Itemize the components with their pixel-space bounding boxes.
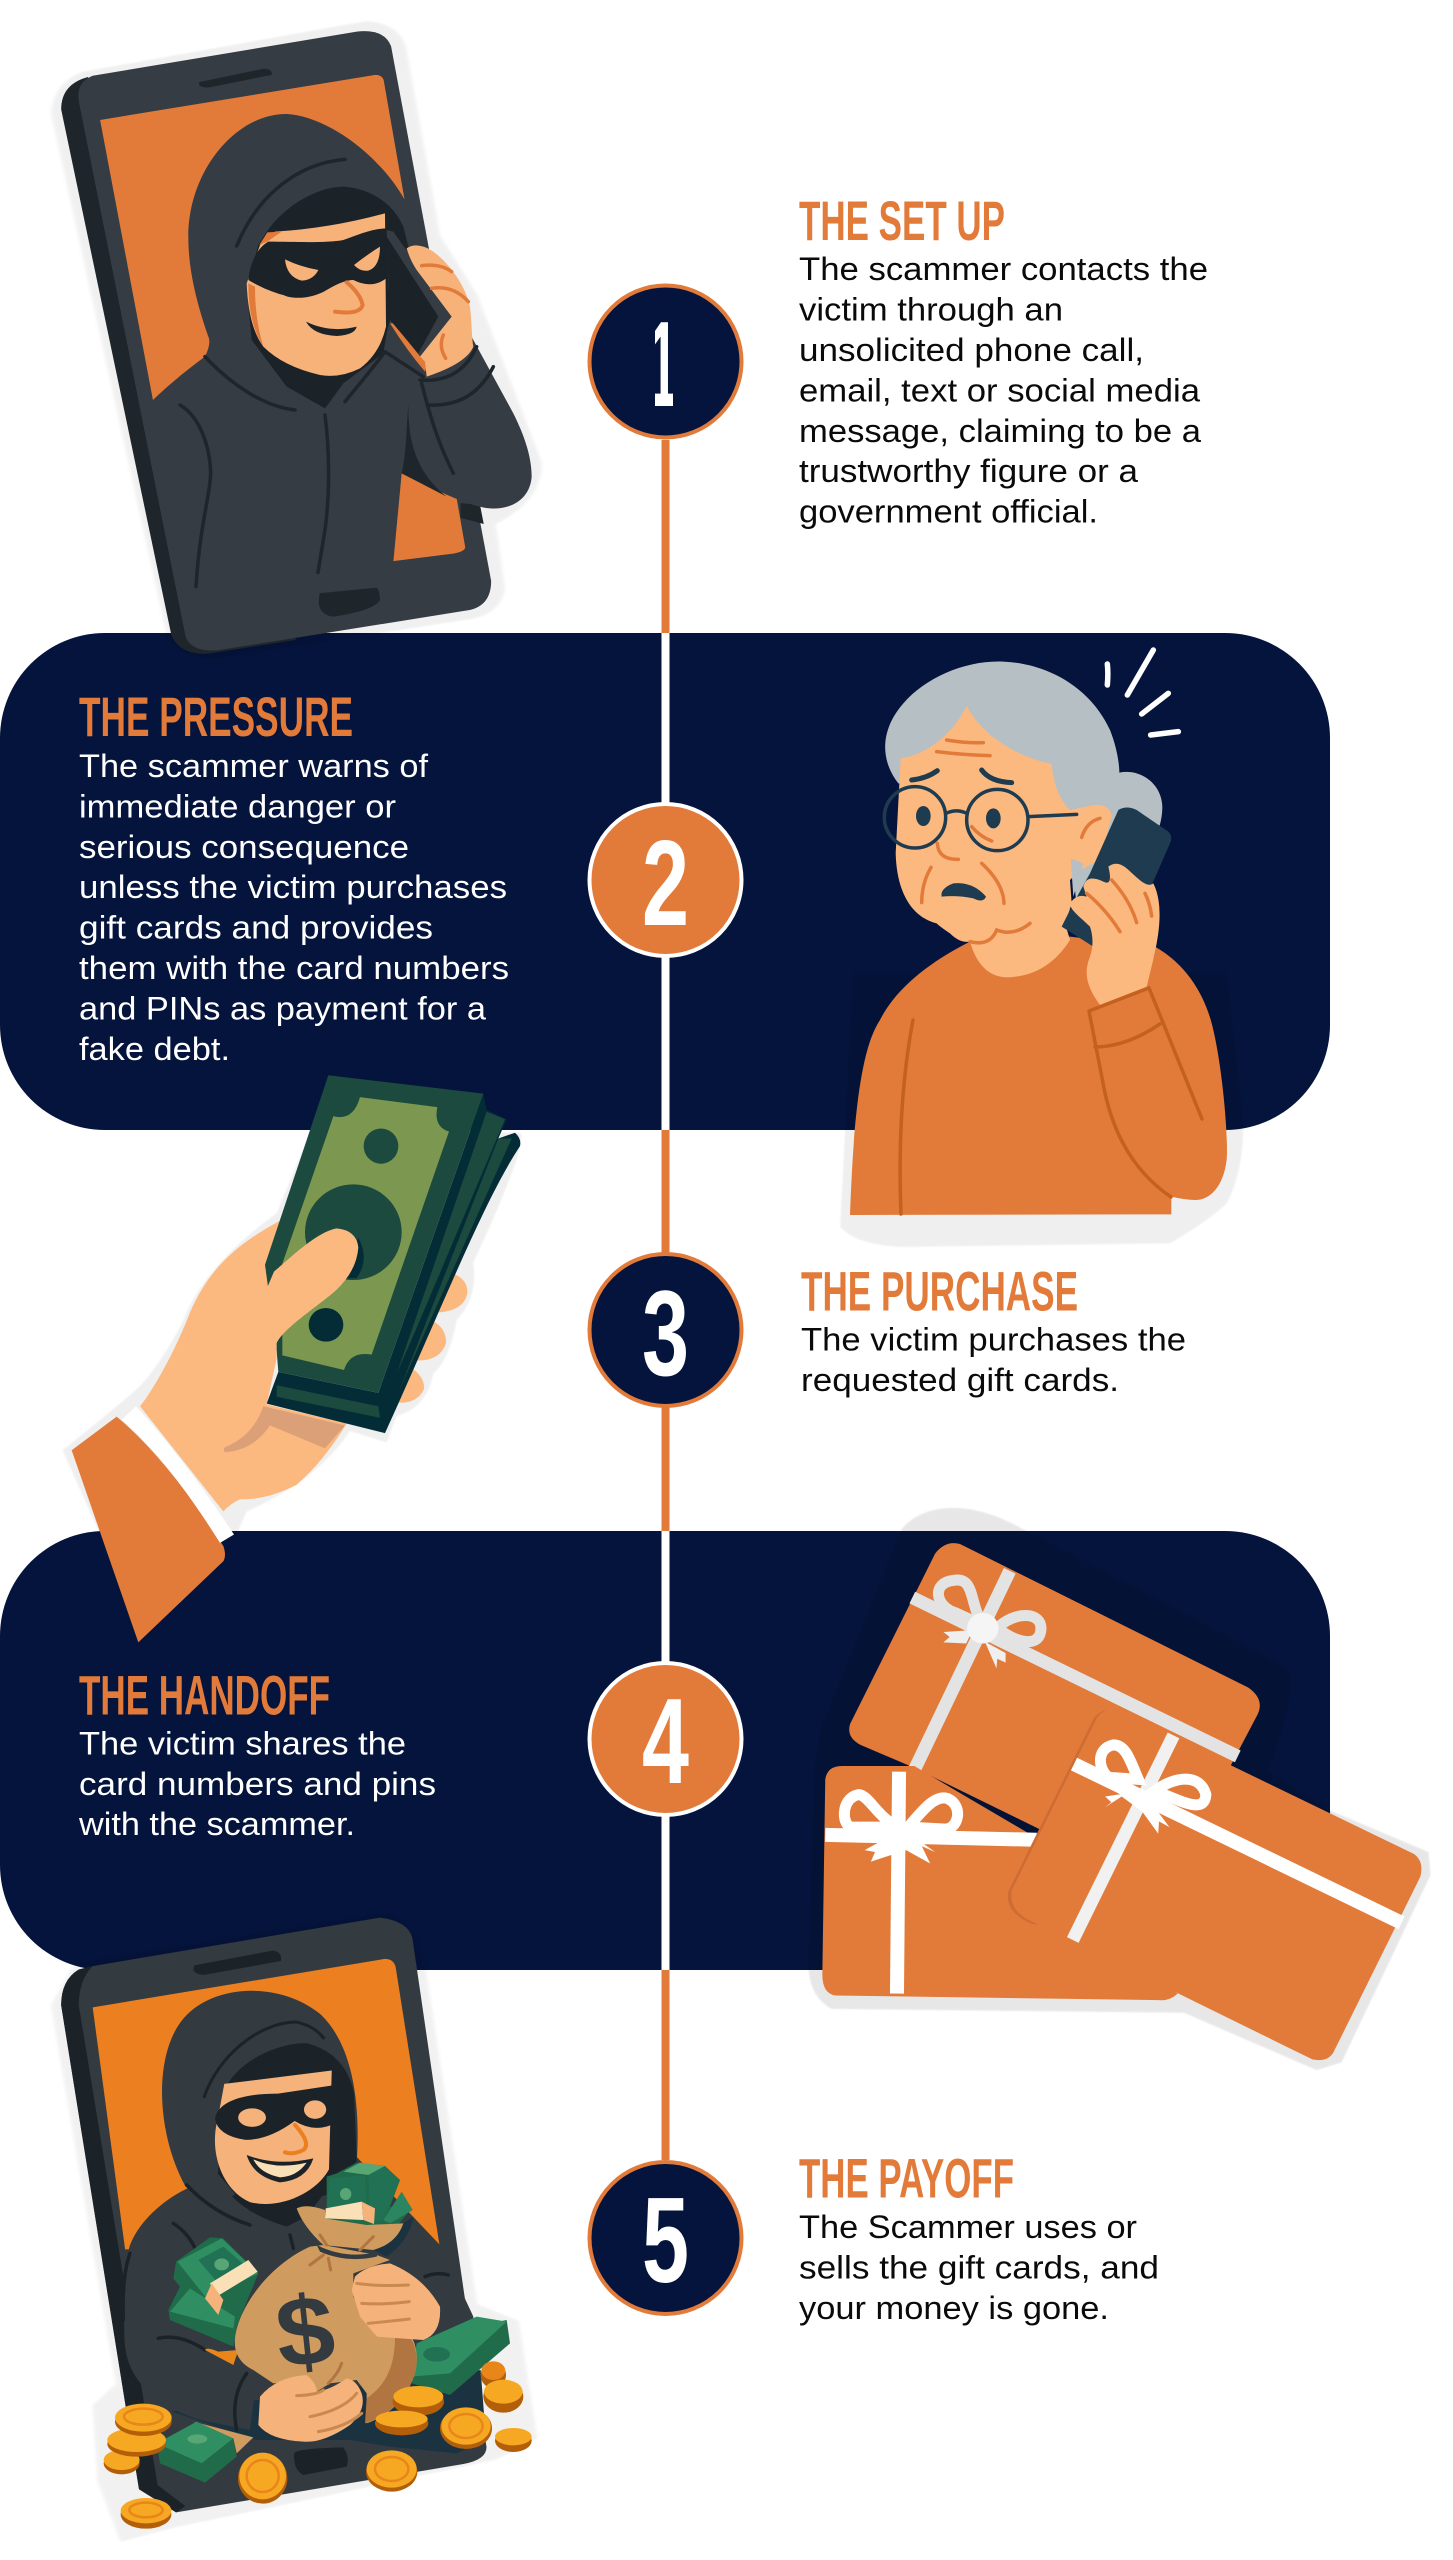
text block: the payoff: your money is gone. — [799, 2290, 1109, 2326]
step 3 number badge: 3 — [642, 1265, 689, 1401]
text block: the set up: unsolicited phone call, — [799, 332, 1144, 368]
panel: handoff band — [0, 1531, 1330, 1970]
text block: the pressure: fake debt. — [79, 1031, 230, 1067]
text block: the pressure — [79, 685, 509, 1067]
illustration: gift cards — [809, 1508, 1431, 2070]
text block: the purchase: The victim purchases the — [801, 1322, 1186, 1358]
text block: the pressure: THE PRESSURE — [79, 685, 353, 748]
text block: the pressure: them with the card numbers — [79, 950, 509, 986]
illustration: scammer on phone — [51, 21, 542, 659]
text block: the pressure: immediate danger or — [79, 788, 396, 824]
text block: the set up: THE SET UP — [799, 189, 1005, 252]
text block: the payoff: The Scammer uses or — [799, 2209, 1137, 2245]
text block: the purchase: requested gift cards. — [801, 1362, 1119, 1398]
text block: the pressure: The scammer warns of — [79, 748, 428, 784]
panel: pressure band — [0, 633, 1330, 1130]
money stack right — [412, 2317, 510, 2395]
text block: the set up: government official. — [799, 494, 1098, 530]
text block: the payoff: sells the gift cards, and — [799, 2250, 1159, 2286]
step 4 number badge: 4 — [642, 1673, 689, 1809]
step 1 number badge: 1 — [648, 296, 678, 432]
text block: the set up: The scammer contacts the — [799, 251, 1208, 287]
step 4 number badge — [590, 1663, 742, 1815]
icon: dollar sign on bag: $ — [271, 2273, 340, 2389]
text block: the set up: email, text or social media — [799, 372, 1200, 408]
money stack top — [325, 2163, 413, 2227]
text block: the pressure: and PINs as payment for a — [79, 990, 486, 1026]
text block: the set up: trustworthy figure or a — [799, 453, 1138, 489]
text block: the handoff: with the scammer. — [78, 1806, 355, 1842]
timeline line — [662, 440, 670, 2160]
text block: the pressure: unless the victim purchases — [79, 869, 507, 905]
gold coins — [104, 2361, 532, 2529]
illustration: scammer with money bag — [51, 1913, 537, 2542]
step 2 number badge — [590, 804, 742, 956]
step 2 number badge: 2 — [642, 815, 689, 951]
illustration: hand holding cash — [63, 1075, 521, 1642]
step 1 number badge — [590, 286, 742, 438]
text block: the handoff: The victim shares the — [79, 1726, 406, 1762]
text block: the handoff: card numbers and pins — [79, 1766, 436, 1802]
money stack left — [168, 2237, 258, 2347]
text block: the pressure: gift cards and provides — [79, 910, 433, 946]
text block: the payoff: THE PAYOFF — [799, 2146, 1014, 2210]
text block: the purchase — [801, 1260, 1186, 1398]
money bag — [235, 2206, 417, 2423]
step 5 number badge — [590, 2162, 742, 2314]
text block: the purchase: THE PURCHASE — [801, 1260, 1078, 1322]
step 3 number badge — [590, 1254, 742, 1406]
text block: the set up: victim through an — [799, 292, 1063, 328]
text block: the payoff — [799, 2146, 1159, 2326]
money stack bottom — [157, 2422, 253, 2483]
text block: the set up: message, claiming to be a — [799, 413, 1201, 449]
text block: the handoff — [78, 1664, 436, 1842]
step 5 number badge: 5 — [642, 2172, 689, 2308]
hands — [258, 2263, 440, 2442]
text block: the handoff: THE HANDOFF — [79, 1664, 330, 1726]
illustration: worried elderly woman on phone — [840, 650, 1243, 1247]
text block: the pressure: serious consequence — [79, 829, 409, 865]
text block: the set up — [799, 189, 1208, 530]
